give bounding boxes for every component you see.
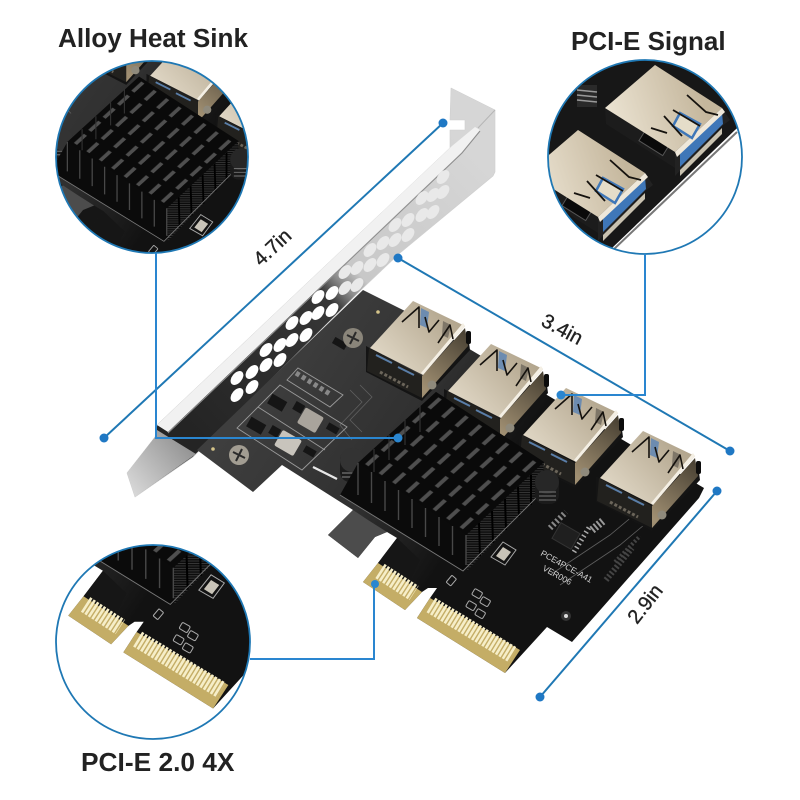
bracket bottom tab	[127, 430, 196, 497]
connector: heat sink inset to card	[156, 253, 402, 442]
inset: PCI-E gold fingers close-up	[55, 544, 251, 740]
dimension line: bracket length	[100, 118, 448, 442]
label: 4.7in: 4.7in	[249, 225, 296, 271]
bracket	[127, 88, 495, 497]
main riser card	[197, 290, 704, 673]
inset: USB PCI-E signal ports close-up	[547, 59, 743, 255]
board silkscreen text: PCE4PCE-A41	[539, 548, 595, 585]
heading: PCI-E 2.0 4X: PCI-E 2.0 4X	[81, 747, 235, 777]
dimension line: card width	[394, 254, 734, 456]
heading: PCI-E Signal: PCI-E Signal	[571, 26, 726, 56]
label: 3.4in: 3.4in	[538, 310, 586, 350]
label: 2.9in: 2.9in	[624, 580, 668, 628]
connector: signal inset to USB port	[556, 254, 645, 400]
dimension line: card height	[536, 486, 722, 702]
connector: gold finger inset to card	[250, 580, 379, 659]
heading: Alloy Heat Sink: Alloy Heat Sink	[58, 23, 248, 53]
board silkscreen text: VER006	[541, 563, 574, 587]
inset: heat sink close-up	[55, 60, 249, 254]
